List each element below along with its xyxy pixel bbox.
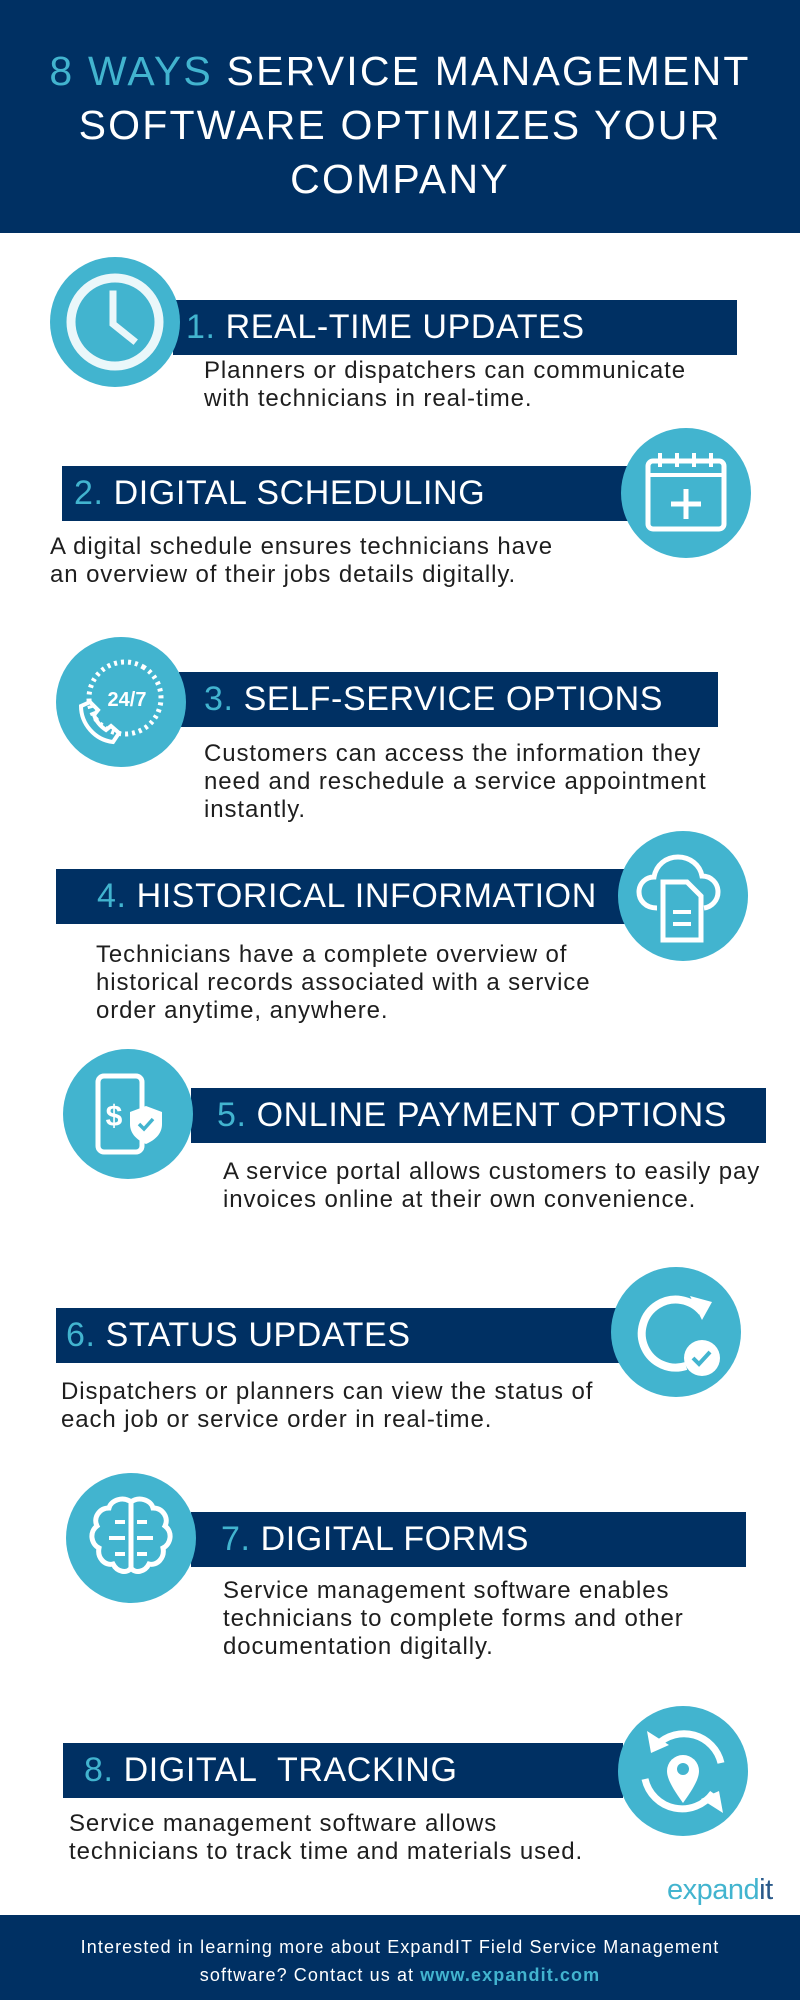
desc 7: documentation digitally.: [223, 1633, 494, 1660]
item 8 bar: 8. DIGITAL TRACKING: [84, 1751, 458, 1789]
item 6 bar: [56, 1308, 625, 1363]
item 7 bar: [191, 1512, 746, 1567]
title: COMPANY: [290, 156, 510, 202]
desc 7: [223, 1577, 684, 1660]
desc 4: [96, 941, 590, 1024]
desc 1: with technicians in real-time.: [204, 385, 532, 412]
desc 3: instantly.: [204, 796, 306, 823]
item 1 bar: 1. REAL-TIME UPDATES: [186, 308, 585, 346]
icon: refresh check: [611, 1267, 741, 1397]
item 3 bar: 3. SELF-SERVICE OPTIONS: [204, 680, 663, 718]
icon: tracking pin: [618, 1706, 748, 1836]
item 2 bar: 2. DIGITAL SCHEDULING: [74, 474, 485, 512]
icon: 24/7 phone: [56, 637, 186, 767]
desc 4: historical records associated with a service: [96, 969, 590, 996]
desc 3: Customers can access the information they: [204, 740, 701, 767]
desc 6: [61, 1378, 593, 1433]
desc 2: [50, 533, 553, 588]
desc 3: [204, 740, 707, 823]
desc 2: an overview of their jobs details digitally.: [50, 561, 516, 588]
item 5 bar: 5. ONLINE PAYMENT OPTIONS: [217, 1096, 727, 1134]
footer: [0, 1915, 800, 2000]
item 4 bar: [56, 869, 636, 924]
footer: software? Contact us at www.expandit.com: [200, 1965, 600, 1985]
item 7 bar: 7. DIGITAL FORMS: [221, 1520, 529, 1558]
icon: phone payment: [63, 1049, 193, 1179]
logo: expandit: expandit: [667, 1874, 773, 1906]
desc 6: each job or service order in real-time.: [61, 1406, 492, 1433]
desc 5: [223, 1158, 760, 1213]
desc 8: [69, 1810, 583, 1865]
item 6 bar: 6. STATUS UPDATES: [66, 1316, 411, 1354]
desc 4: order anytime, anywhere.: [96, 997, 388, 1024]
icon: 24/7 phone: 24/7: [108, 689, 146, 711]
item 8 bar: [63, 1743, 623, 1798]
desc 1: Planners or dispatchers can communicate: [204, 357, 686, 384]
icon: calendar: [621, 428, 751, 558]
icon: cloud document: [618, 831, 748, 961]
desc 7: Service management software enables: [223, 1577, 669, 1604]
desc 2: A digital schedule ensures technicians have: [50, 533, 553, 560]
item 4 bar: 4. HISTORICAL INFORMATION: [97, 877, 597, 915]
desc 8: Service management software allows: [69, 1810, 497, 1837]
desc 1: [204, 357, 686, 412]
title: SOFTWARE OPTIMIZES YOUR: [79, 102, 721, 148]
item 3 bar: [179, 672, 718, 727]
item 2 bar: [62, 466, 628, 521]
title: 8 WAYS SERVICE MANAGEMENT: [49, 48, 751, 94]
item 5 bar: [191, 1088, 766, 1143]
icon: brain circuit: [66, 1473, 196, 1603]
desc 3: need and reschedule a service appointment: [204, 768, 707, 795]
desc 5: A service portal allows customers to easily pay: [223, 1158, 760, 1185]
desc 5: invoices online at their own convenience.: [223, 1186, 696, 1213]
desc 8: technicians to track time and materials used.: [69, 1838, 583, 1865]
item 1 bar: [173, 300, 737, 355]
footer: Interested in learning more about ExpandIT Field Service Management: [81, 1937, 719, 1957]
icon: phone payment: $: [106, 1100, 123, 1133]
desc 6: Dispatchers or planners can view the status of: [61, 1378, 593, 1405]
desc 4: Technicians have a complete overview of: [96, 941, 567, 968]
header: [0, 0, 800, 233]
desc 7: technicians to complete forms and other: [223, 1605, 684, 1632]
title: [49, 48, 751, 202]
icon: clock: [50, 257, 180, 387]
